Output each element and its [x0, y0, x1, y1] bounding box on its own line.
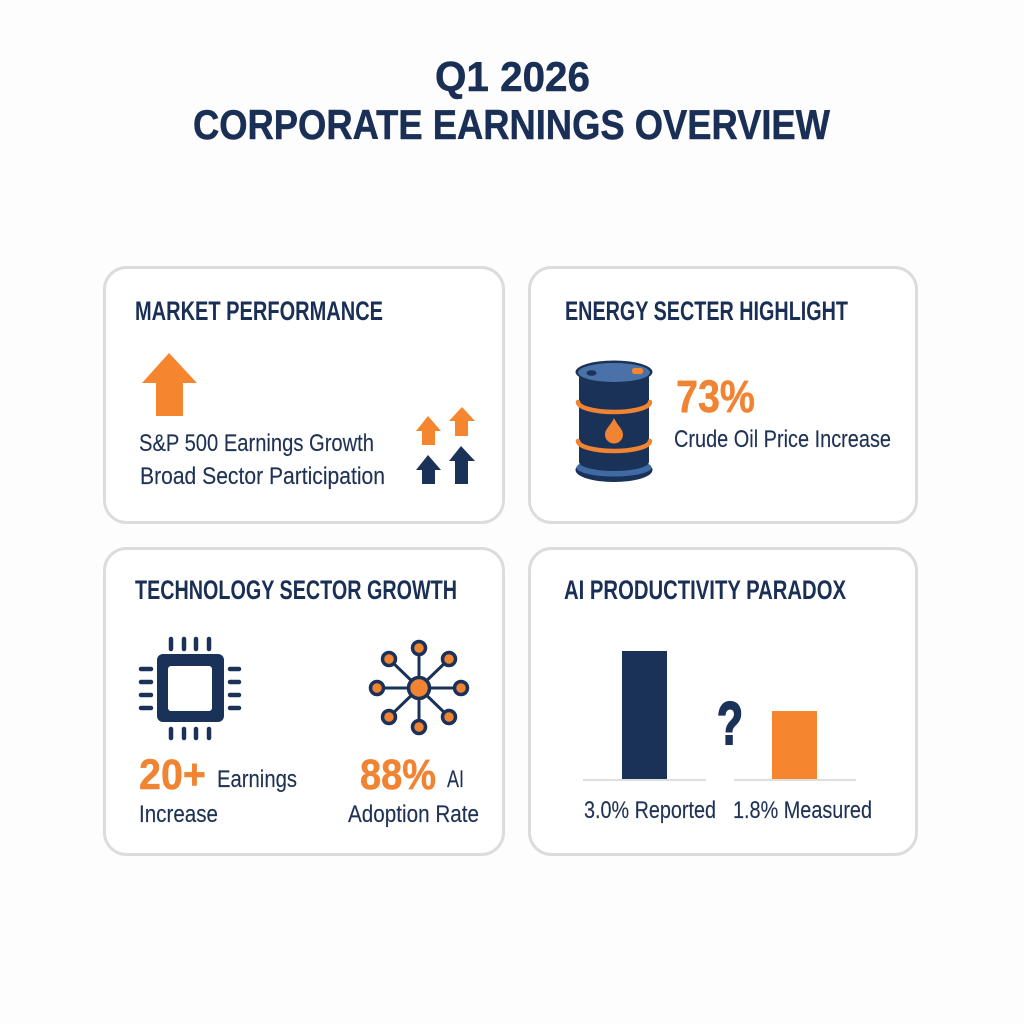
stat: 88 percent AI adoption rate: [348, 751, 479, 828]
label: reported: 3.0% Reported: [584, 797, 716, 824]
stat: 20+ earnings increase: Earnings: [217, 766, 297, 793]
heading: AI productivity paradox: AI PRODUCTIVITY PARADOX: [564, 575, 846, 605]
panel: market performance: [104, 268, 504, 522]
icon: oil barrel: [576, 360, 652, 482]
panel: AI productivity paradox: [530, 548, 916, 854]
heading: technology sector: TECHNOLOGY SECTOR GROWTH: [135, 575, 457, 605]
text: market description: [139, 430, 385, 490]
text: market description: Broad Sector Participation: [140, 463, 385, 490]
stat: 88 percent AI adoption rate: Adoption Rate: [348, 801, 479, 828]
stat: 20+ earnings increase: 20+: [139, 751, 206, 799]
stat: 88 percent AI adoption rate: AI: [447, 766, 464, 793]
title: CORPORATE EARNINGS OVERVIEW: [193, 101, 830, 148]
text: market description: S&P 500 Earnings Growth: [139, 430, 374, 457]
icon: microchip: [141, 639, 239, 738]
stat: 20+ earnings increase: Increase: [139, 801, 218, 828]
title: Q1 2026: [435, 53, 590, 100]
bar: reported: [622, 651, 667, 779]
heading: market performance: MARKET PERFORMANCE: [135, 296, 383, 326]
bar: measured: [772, 711, 817, 779]
panel: energy sector highlight: [530, 268, 916, 522]
title: [193, 53, 830, 148]
icon: question mark: ?: [717, 690, 743, 757]
label: measured: 1.8% Measured: [733, 797, 872, 824]
text: crude oil label: Crude Oil Price Increase: [674, 426, 891, 453]
panel: technology sector growth: [104, 548, 504, 854]
icon: network: [370, 642, 468, 734]
bar chart: [583, 651, 856, 781]
stat: 88 percent AI adoption rate: 88%: [360, 751, 436, 799]
stat: 73 percent: 73%: [676, 371, 755, 422]
heading: energy sector: ENERGY SECTER HIGHLIGHT: [565, 296, 848, 326]
stat: 20+ earnings increase: [139, 751, 297, 828]
icon: large up arrow: [142, 353, 197, 416]
icon: sector arrows: [416, 407, 475, 484]
